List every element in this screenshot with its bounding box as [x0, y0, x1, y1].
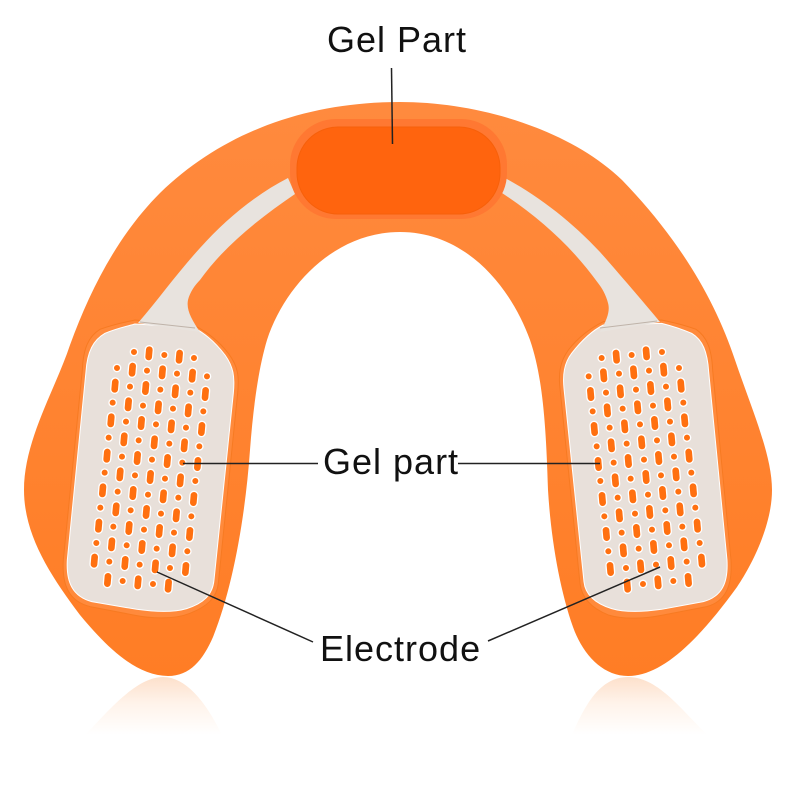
perforations [90, 345, 211, 594]
pad border [559, 320, 731, 618]
leader line: right gel part [458, 462, 600, 464]
center gel part [290, 119, 507, 219]
right strap seam [600, 321, 657, 328]
reflection: left lobe [85, 677, 222, 735]
pad surface [564, 323, 727, 611]
leader line: top gel part [392, 68, 393, 144]
right electrode pad [559, 320, 731, 618]
device body [24, 102, 772, 676]
leader line: left gel part [183, 462, 318, 464]
label: Electrode: Electrode [320, 628, 481, 669]
leader line: left electrode [157, 572, 313, 642]
label: Gel Part: Gel Part [327, 19, 467, 60]
perforations [585, 345, 706, 594]
left strap [138, 178, 295, 332]
reflection: right lobe [572, 677, 708, 735]
pad surface [67, 324, 234, 611]
right strap [502, 178, 660, 332]
pad border [63, 320, 238, 618]
leader line: right electrode [488, 567, 660, 641]
left electrode pad [63, 320, 238, 618]
left strap seam [140, 322, 195, 328]
label: Gel part: Gel part [323, 441, 459, 482]
